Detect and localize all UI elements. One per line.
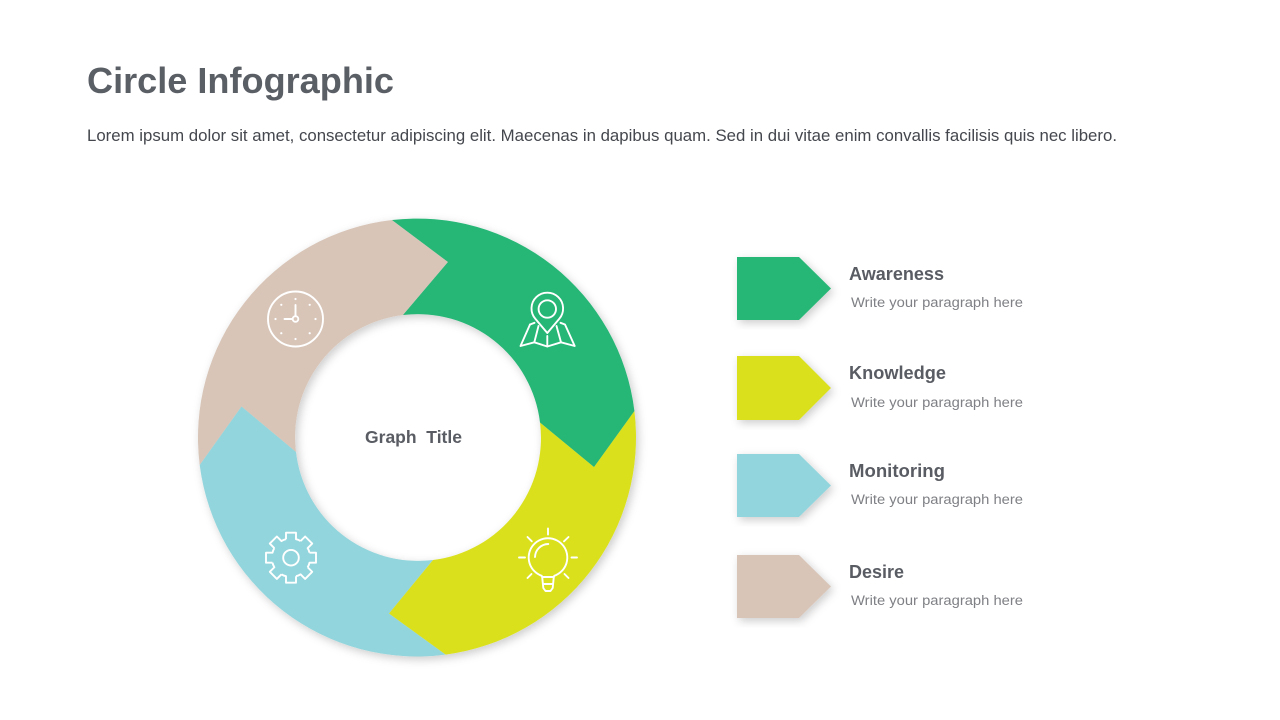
segment: monitoring	[200, 406, 446, 656]
title: Circle Infographic	[87, 60, 394, 101]
icon: map pin	[520, 293, 575, 346]
legend item: monitoring	[737, 454, 1023, 517]
segment: awareness	[392, 219, 634, 467]
arrow marker	[737, 356, 831, 420]
ring segments	[198, 219, 636, 656]
arrow marker	[737, 454, 831, 517]
description: Write your paragraph here	[851, 593, 1023, 608]
legend item: awareness	[737, 257, 1023, 320]
icon: gear	[266, 533, 316, 583]
heading: Monitoring	[849, 461, 945, 481]
description: Write your paragraph here	[851, 395, 1023, 410]
graph title: Graph Title	[365, 427, 462, 447]
legend item: desire	[737, 555, 1023, 618]
circular chart	[198, 219, 636, 656]
legend item: knowledge	[737, 356, 1023, 420]
heading: Awareness	[849, 264, 944, 284]
description: Write your paragraph here	[851, 492, 1023, 507]
segment: desire	[198, 220, 448, 465]
segment: knowledge	[389, 411, 636, 655]
description: Write your paragraph here	[851, 295, 1023, 310]
arrow marker	[737, 555, 831, 618]
heading: Desire	[849, 562, 904, 582]
icon: light bulb	[519, 528, 577, 591]
icon: clock	[268, 292, 323, 346]
subtitle paragraph: Lorem ipsum dolor sit amet, consectetur adipiscing elit. Maecenas in dapibus quam. Sed in dui vitae enim convallis facilisis quis nec libero.	[87, 127, 1117, 145]
heading: Knowledge	[849, 363, 946, 383]
arrow marker	[737, 257, 831, 320]
